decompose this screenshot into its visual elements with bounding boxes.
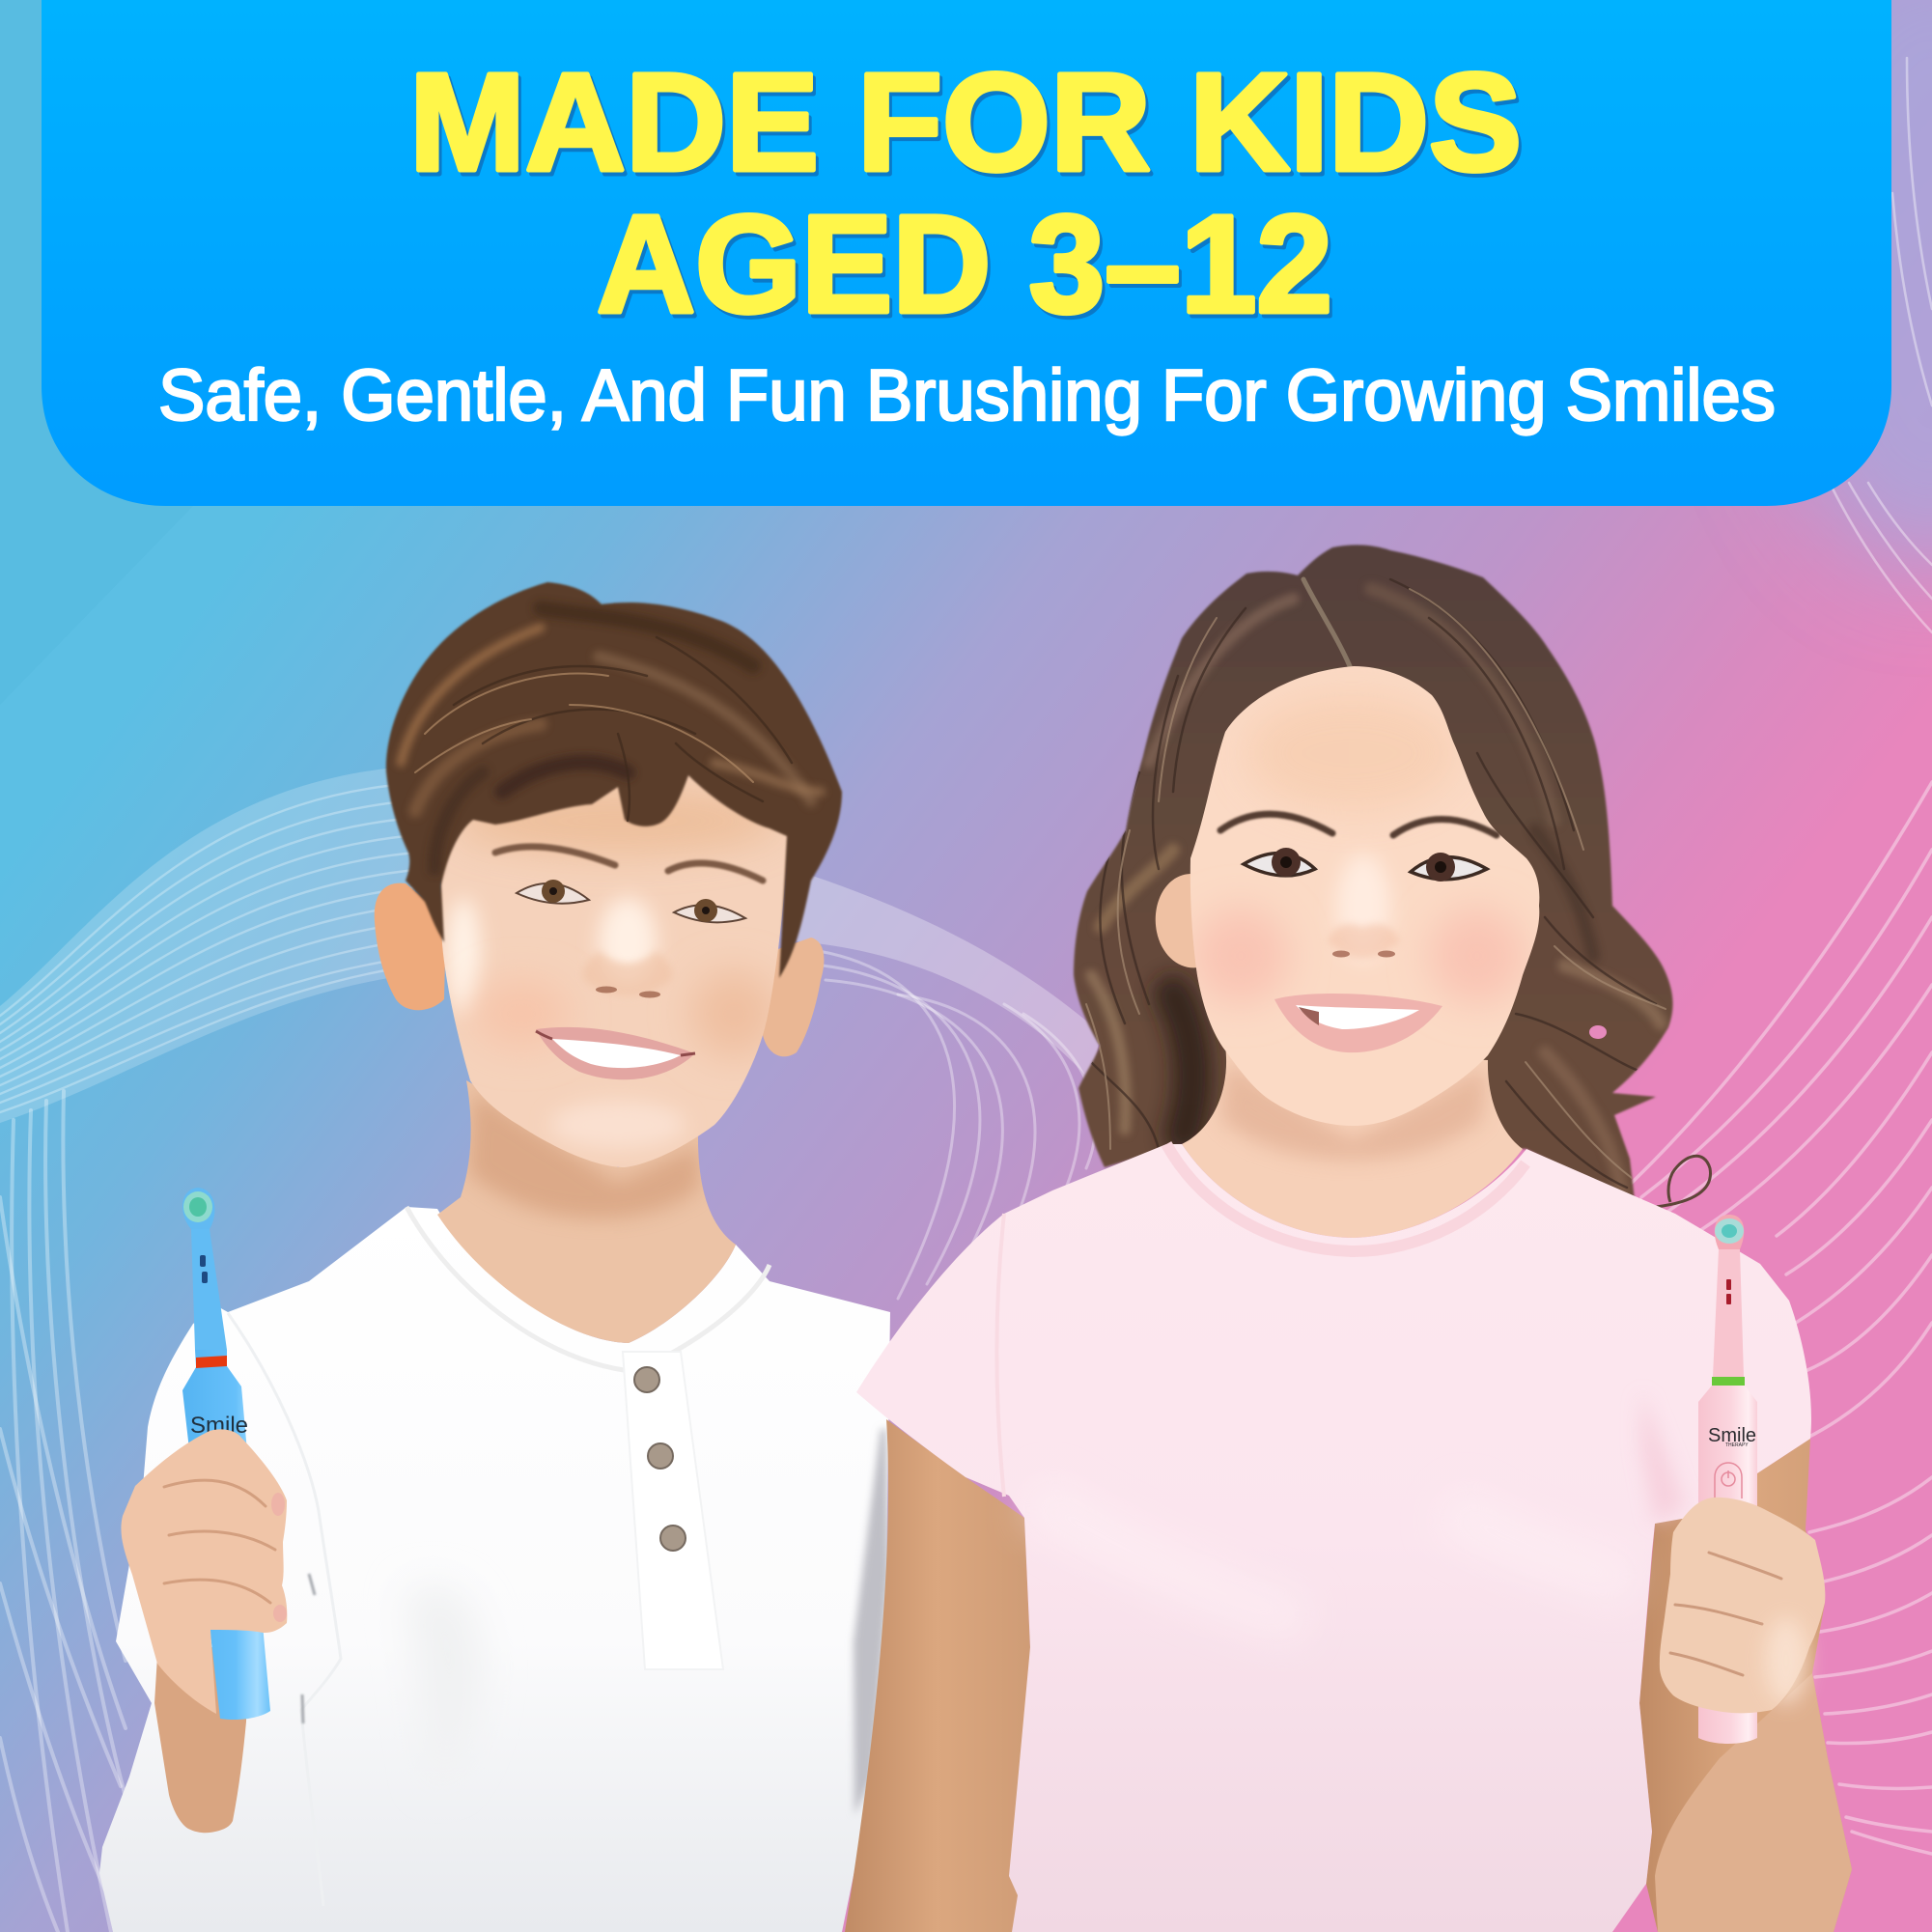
boy nose xyxy=(583,951,672,998)
pink brush neck xyxy=(1713,1249,1744,1377)
title xyxy=(409,44,1522,342)
red band xyxy=(196,1356,227,1368)
pink brush logo: THERAPY xyxy=(1725,1442,1749,1448)
boy right eye xyxy=(674,899,745,922)
green band xyxy=(1712,1377,1745,1386)
girl right eye xyxy=(1411,853,1487,882)
boy hair xyxy=(386,582,842,978)
boy neck xyxy=(437,1080,736,1343)
subtitle: Safe, Gentle, And Fun Brushing For Growing Smiles xyxy=(158,354,1776,435)
girl hand xyxy=(1660,1498,1825,1713)
boy neck shadow xyxy=(468,1091,700,1218)
girl ear xyxy=(1156,874,1198,967)
boy xyxy=(99,582,890,1932)
button placket xyxy=(623,1352,723,1669)
blue toothbrush xyxy=(182,1188,270,1720)
girl hair strands xyxy=(1086,579,1666,1192)
girl smile xyxy=(1274,994,1442,1052)
title: MADE FOR KIDS xyxy=(409,44,1522,200)
hair gap xyxy=(1589,1025,1607,1039)
girl face xyxy=(1190,666,1539,1126)
girl forearm xyxy=(1655,1673,1852,1932)
shirt buttons xyxy=(634,1367,686,1551)
boy left eye xyxy=(517,880,589,904)
girl neck shadow xyxy=(1221,1062,1487,1160)
pink toothbrush xyxy=(1698,1215,1757,1744)
title: AGED 3–12 xyxy=(597,186,1332,342)
boy forearm xyxy=(154,1641,248,1833)
brush logo: Smile xyxy=(190,1413,248,1439)
boy right ear xyxy=(763,938,824,1056)
brush slots xyxy=(200,1255,208,1283)
brush head xyxy=(182,1188,214,1229)
pink brush slots xyxy=(1726,1279,1731,1304)
boy eyebrows xyxy=(495,847,763,881)
girl back hair xyxy=(1074,545,1673,1200)
boy face xyxy=(440,753,789,1167)
boy smile xyxy=(536,1027,695,1079)
girl eyebrows xyxy=(1220,814,1497,835)
pink brush body xyxy=(1698,1386,1757,1744)
header banner xyxy=(42,0,1891,506)
girl neck xyxy=(1182,1046,1523,1238)
girl arm right xyxy=(1639,1439,1852,1932)
pink brush head xyxy=(1715,1215,1744,1249)
girl pink shirt xyxy=(856,1144,1811,1932)
girl nose xyxy=(1328,924,1400,958)
power button xyxy=(1715,1463,1742,1498)
girl arm left xyxy=(845,1419,1030,1932)
pink brush logo: Smile xyxy=(1708,1425,1756,1446)
boy white henley shirt xyxy=(99,1207,890,1932)
girl left eye xyxy=(1244,848,1315,877)
brush neck xyxy=(191,1229,227,1350)
boy left ear xyxy=(375,883,446,1010)
brush body xyxy=(182,1350,270,1720)
boy hand xyxy=(121,1429,287,1714)
girl xyxy=(845,545,1852,1932)
hair curl xyxy=(1518,1156,1711,1209)
